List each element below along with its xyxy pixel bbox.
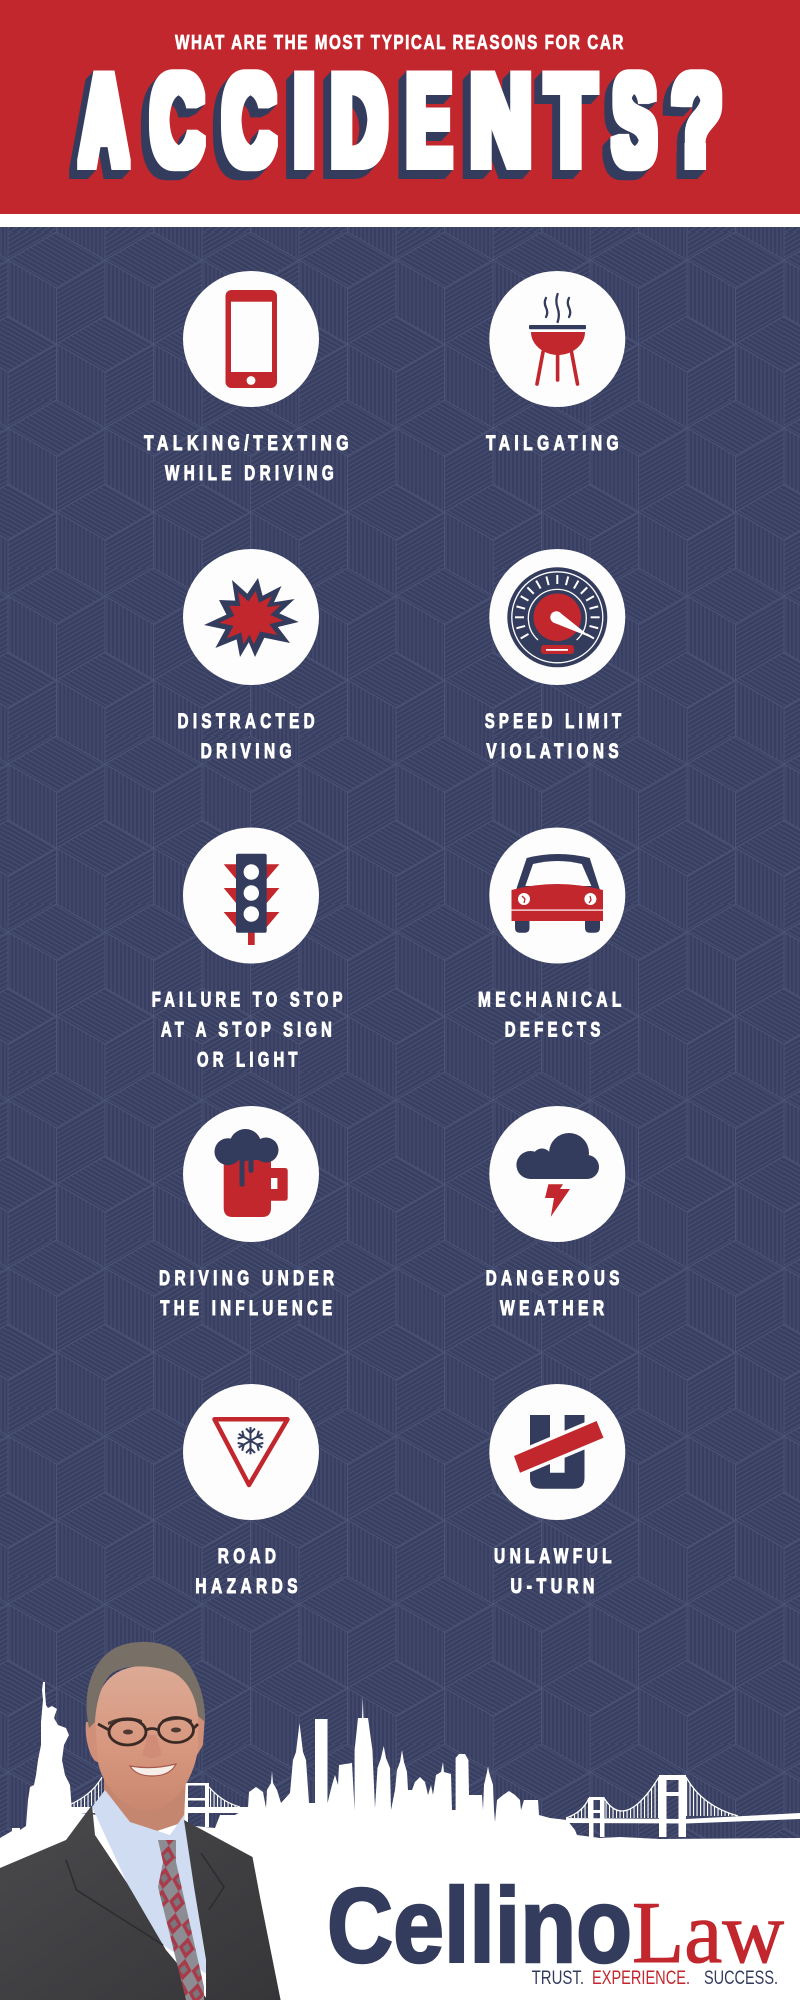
label: OR LIGHT [197,1048,302,1072]
label [485,710,625,763]
icon: smartphone [183,271,319,407]
item: talking/texting [144,271,353,485]
label [494,1545,616,1598]
Cellino Law logo [327,1867,784,1989]
item: distracted driving [178,549,319,763]
item: unlawful u-turn [489,1384,625,1598]
eyebrows and eyes [108,1716,192,1734]
icon: traffic light [183,828,319,964]
label: FAILURE TO STOP [152,988,347,1012]
label: THE INFLUENCE [160,1297,336,1320]
label [195,1545,302,1598]
label: WHILE DRIVING [165,462,338,485]
smile [130,1764,176,1776]
label [152,988,347,1072]
item: tailgating [486,271,625,455]
tagline: EXPERIENCE. [592,1967,690,1989]
label: WEATHER [500,1297,608,1320]
title: ACCIDENTS?: A [80,47,128,193]
label [159,1267,338,1320]
label: AT A STOP SIGN [161,1018,336,1042]
label: HAZARDS [195,1575,302,1598]
title: ACCIDENTS?: N [470,47,532,193]
icon: storm cloud [489,1106,625,1242]
label: DANGEROUS [486,1267,624,1290]
label: VIOLATIONS [486,740,623,763]
label [486,1267,624,1320]
icon: car front [489,828,625,964]
item: mechanical defects [478,828,626,1042]
lapel lines [66,1853,224,1945]
icon: barbecue grill [489,271,625,407]
title: ACCIDENTS?: D [331,47,387,193]
wordmark: Cellino: Cellino [327,1867,632,1985]
label: DEFECTS [505,1018,605,1042]
label: UNLAWFUL [494,1545,616,1568]
icon: explosion burst [183,549,319,685]
label: DISTRACTED [178,710,319,733]
right bridge [566,1775,800,1837]
label: ROAD [218,1545,280,1568]
title: ACCIDENTS?: S [614,47,656,193]
title: ACCIDENTS?: ? [672,47,722,193]
item: dangerous weather [486,1106,625,1320]
title: ACCIDENTS?: E [407,47,451,193]
attorney portrait [0,1642,281,2000]
label [144,432,353,485]
left bridge [69,1777,250,1827]
icon: yield sign with snowflake [183,1384,319,1520]
subtitle: WHAT ARE THE MOST TYPICAL REASONS FOR CAR [175,32,625,54]
nose shadow [142,1735,162,1758]
label [178,710,319,763]
item: driving under the influence [159,1106,338,1320]
label: MECHANICAL [478,988,626,1012]
tie [158,1840,204,2000]
icon: beer mug [183,1106,319,1242]
title: ACCIDENTS?: T [546,47,595,193]
label: SPEED LIMIT [485,710,625,733]
city skyline silhouette [0,1682,800,2000]
icon: speedometer [489,549,625,685]
neck [104,1775,186,1840]
hair [87,1642,205,1728]
title: ACCIDENTS?: C [223,47,275,193]
label: TAILGATING [486,432,623,455]
label [478,988,626,1042]
face [95,1666,198,1810]
item: road hazards [183,1384,319,1598]
shirt [92,1790,208,1975]
title: ACCIDENTS? [80,47,722,193]
suit [0,1805,281,2000]
label: DRIVING [201,740,296,763]
ears [86,1712,205,1762]
label: U-TURN [510,1575,599,1598]
tagline [532,1967,778,1989]
glasses [98,1718,198,1745]
header banner [0,0,800,214]
wordmark: Law: Law [632,1885,784,1982]
item: failure to stop [152,828,347,1072]
icon: no u-turn [489,1384,625,1520]
tagline: TRUST. [532,1967,584,1989]
item: speed limit violations [485,549,625,763]
label: TALKING/TEXTING [144,432,353,455]
label: DRIVING UNDER [159,1267,338,1290]
title: ACCIDENTS?: C [151,47,203,193]
title: ACCIDENTS?: I [294,47,314,193]
